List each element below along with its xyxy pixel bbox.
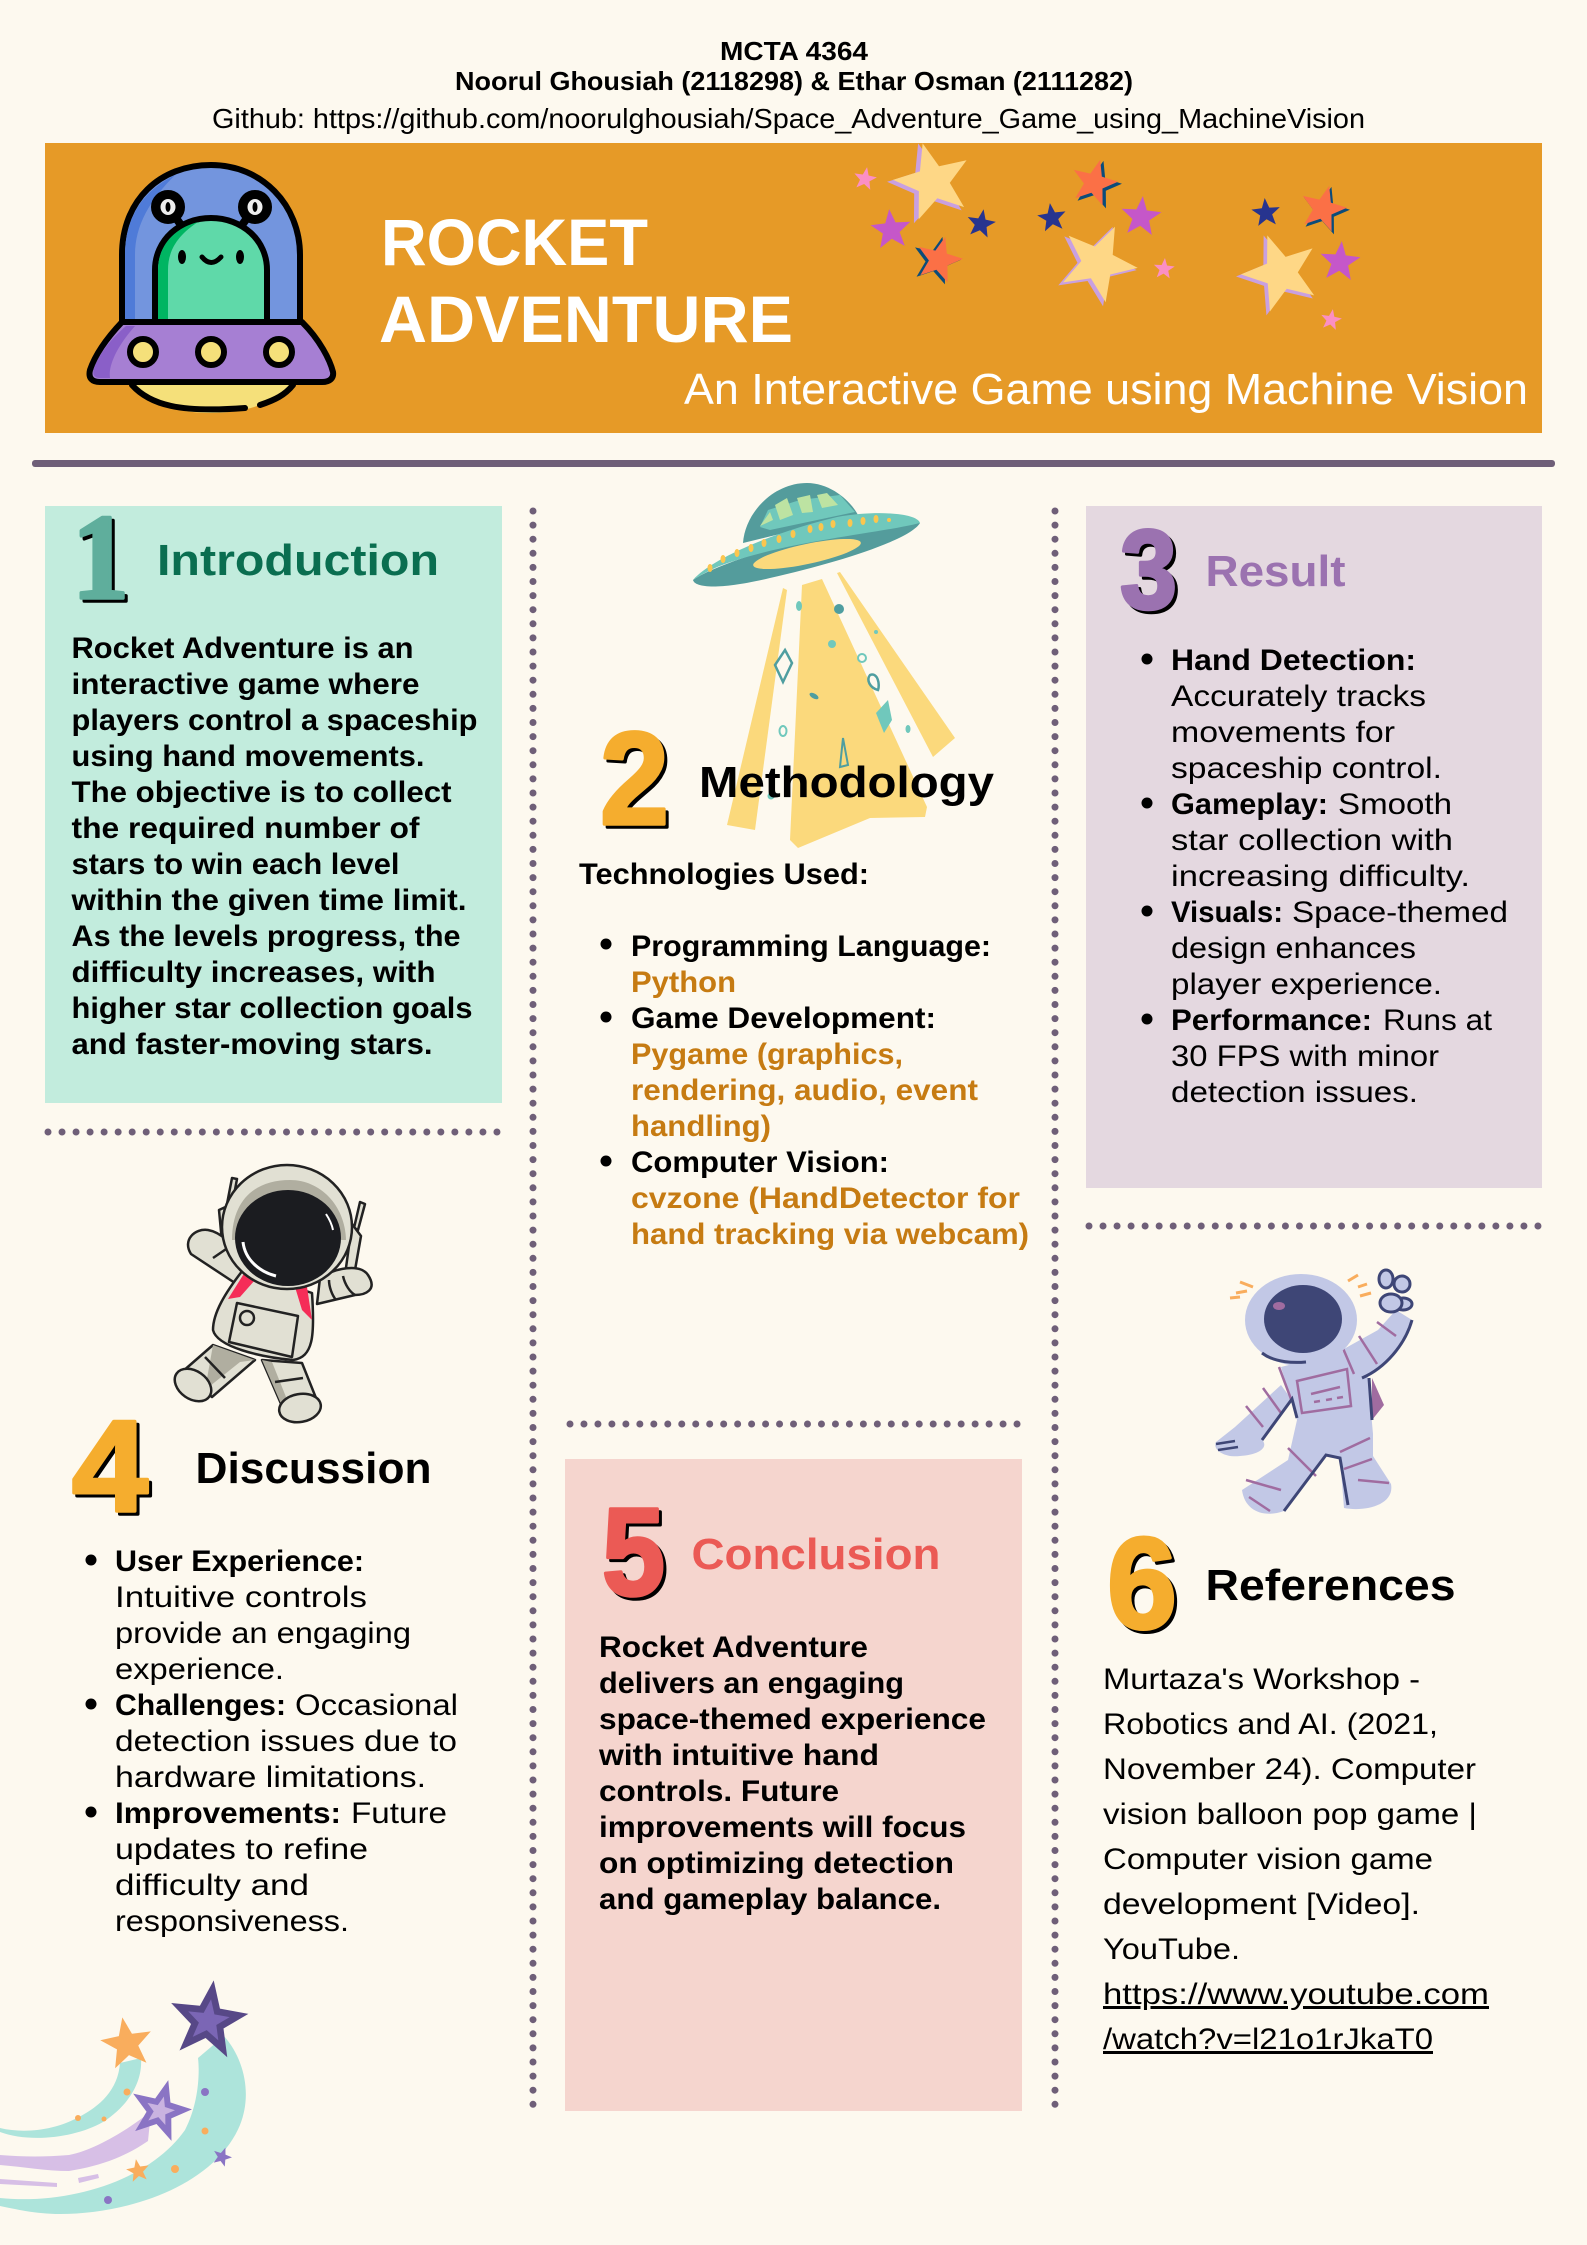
heading: Result — [1206, 547, 1346, 596]
body text: controls. Future — [599, 1775, 839, 1808]
discussion list: responsiveness. — [115, 1905, 349, 1938]
header credits: Github: https://github.com/noorulghousiah/Space_Adventure_Game_using_MachineVision — [212, 103, 1365, 134]
number 2: 2 — [603, 708, 672, 855]
results list: star collection with — [1171, 824, 1453, 857]
panel: conclusion — [565, 1459, 1022, 2111]
reference text: Murtaza's Workshop - — [1103, 1663, 1420, 1696]
number 4: 4 — [72, 1393, 148, 1539]
body text — [70, 632, 477, 1061]
panel: methodology — [579, 483, 1029, 1251]
discussion list: User Experience: — [115, 1545, 364, 1578]
body text: and gameplay balance. — [599, 1883, 941, 1916]
number 3: 3 — [1123, 510, 1180, 635]
body text: interactive game where — [72, 668, 420, 701]
number 4: 4 — [75, 1396, 151, 1542]
body text: As the levels progress, the — [72, 920, 460, 953]
reference text: vision balloon pop game | — [1103, 1798, 1477, 1831]
reference text: Computer vision game — [1103, 1843, 1433, 1876]
icon: flying saucer with beam — [693, 483, 955, 848]
number 6: 6 — [1110, 1513, 1180, 1659]
discussion list: provide an engaging — [115, 1617, 411, 1650]
banner title: ADVENTURE — [379, 282, 793, 356]
discussion list — [86, 1545, 458, 1938]
reference text: /watch?v=l21o1rJkaT0 — [1103, 2023, 1433, 2056]
heading: Conclusion — [692, 1530, 940, 1579]
results list: design enhances — [1171, 932, 1416, 965]
banner title: ROCKET — [381, 205, 648, 279]
icon: shooting stars — [0, 1975, 252, 2214]
technologies list: Python — [631, 966, 736, 999]
number 6: 6 — [1107, 1510, 1177, 1656]
technologies list: Programming Language: — [631, 930, 991, 963]
discussion list: updates to refine — [115, 1833, 368, 1866]
body text: and faster-moving stars. — [72, 1028, 432, 1061]
reference text: https://www.youtube.com — [1103, 1978, 1489, 2011]
technologies list: Technologies Used: — [579, 858, 869, 891]
reference text: Robotics and AI. (2021, — [1103, 1708, 1438, 1741]
results list: Visuals: — [1171, 896, 1283, 929]
header credits: MCTA 4364 — [720, 36, 869, 66]
body text: delivers an engaging — [599, 1667, 904, 1700]
results list: Runs at — [1383, 1004, 1493, 1037]
heading: Introduction — [157, 536, 439, 585]
panel: result — [1086, 506, 1542, 1188]
heading: References — [1206, 1561, 1456, 1610]
body text: on optimizing detection — [599, 1847, 954, 1880]
icon: banner stars — [852, 133, 1362, 331]
body text: within the given time limit. — [70, 884, 467, 917]
discussion list: Improvements: — [115, 1797, 341, 1830]
discussion list: Occasional — [295, 1689, 458, 1722]
results list: Smooth — [1338, 788, 1452, 821]
discussion list: experience. — [115, 1653, 284, 1686]
body text: the required number of — [72, 812, 421, 845]
body text: difficulty increases, with — [72, 956, 436, 989]
header credits: Noorul Ghousiah (2118298) & Ethar Osman (2111282) — [455, 66, 1133, 96]
results list: Performance: — [1171, 1004, 1372, 1037]
results list: Space-themed — [1292, 896, 1508, 929]
discussion list: detection issues due to — [115, 1725, 457, 1758]
results list: 30 FPS with minor — [1171, 1040, 1439, 1073]
body text: using hand movements. — [72, 740, 424, 773]
number 3: 3 — [1120, 507, 1177, 632]
reference text — [1103, 1663, 1489, 2056]
technologies list: cvzone (HandDetector for — [631, 1182, 1020, 1215]
discussion list: Future — [351, 1797, 447, 1830]
body text — [598, 1631, 986, 1916]
body text: stars to win each level — [72, 848, 399, 881]
panel: references — [1103, 1510, 1489, 2056]
number 1: 1 — [72, 490, 129, 625]
number 5: 5 — [602, 1484, 665, 1622]
banner title — [379, 205, 793, 356]
icon: waving astronaut — [1215, 1270, 1412, 1514]
body text: Rocket Adventure — [599, 1631, 868, 1664]
technologies list: handling) — [631, 1110, 771, 1143]
results list: spaceship control. — [1171, 752, 1442, 785]
technologies list: rendering, audio, event — [631, 1074, 978, 1107]
body text: space-themed experience — [599, 1703, 986, 1736]
body text: The objective is to collect — [72, 776, 452, 809]
discussion list: hardware limitations. — [115, 1761, 426, 1794]
heading: Discussion — [196, 1444, 432, 1493]
number 1: 1 — [75, 493, 132, 628]
technologies list — [579, 858, 1029, 1251]
discussion list: difficulty and — [115, 1869, 309, 1902]
results list: movements for — [1171, 716, 1395, 749]
results list: Accurately tracks — [1171, 680, 1426, 713]
technologies list: Computer Vision: — [631, 1146, 889, 1179]
results list: Gameplay: — [1171, 788, 1328, 821]
results list: detection issues. — [1171, 1076, 1418, 1109]
reference text: November 24). Computer — [1103, 1753, 1476, 1786]
body text: Rocket Adventure is an — [72, 632, 414, 665]
panel: discussion — [72, 1393, 458, 1938]
header credits — [212, 36, 1365, 134]
heading: Methodology — [699, 758, 995, 807]
results list: increasing difficulty. — [1171, 860, 1470, 893]
body text: improvements will focus — [599, 1811, 966, 1844]
results list: Hand Detection: — [1171, 644, 1416, 677]
technologies list: Game Development: — [631, 1002, 936, 1035]
panel: introduction — [45, 490, 502, 1103]
body text: players control a spaceship — [72, 704, 477, 737]
discussion list: Intuitive controls — [115, 1581, 367, 1614]
reference text: development [Video]. — [1103, 1888, 1420, 1921]
reference text: YouTube. — [1103, 1933, 1240, 1966]
technologies list: hand tracking via webcam) — [631, 1218, 1029, 1251]
body text: with intuitive hand — [598, 1739, 879, 1772]
icon: floating astronaut — [169, 1165, 372, 1425]
technologies list: Pygame (graphics, — [631, 1038, 903, 1071]
results list: player experience. — [1171, 968, 1442, 1001]
title banner — [45, 133, 1542, 433]
number 2: 2 — [600, 705, 669, 852]
discussion list: Challenges: — [115, 1689, 286, 1722]
body text: higher star collection goals — [72, 992, 472, 1025]
number 5: 5 — [605, 1487, 668, 1625]
icon: alien in flying saucer — [89, 165, 333, 413]
results list — [1142, 644, 1508, 1109]
banner subtitle: An Interactive Game using Machine Vision — [684, 365, 1528, 414]
